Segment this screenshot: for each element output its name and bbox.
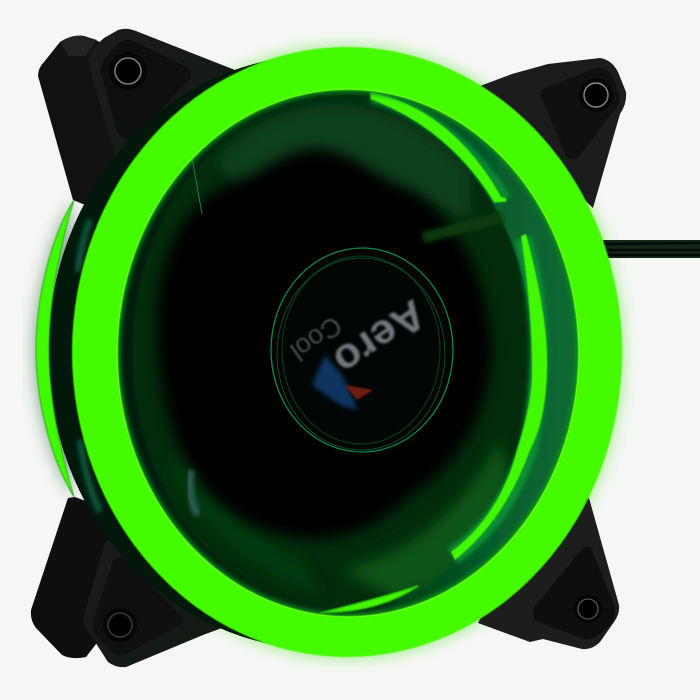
icon: screw hole top left [109,52,147,90]
logo text: Cool: Cool [285,310,348,367]
mounting corner: top left [88,29,240,200]
mounting corner: bottom left rear [31,497,130,658]
lower left shade [174,463,311,588]
outer green glow [34,47,622,657]
fan opening [131,92,578,614]
lower right highlight [340,440,510,600]
inner LED arc: upper [372,94,506,201]
power cable [603,240,700,258]
inner LED arc: right [451,234,547,560]
upper blade highlight [215,105,470,220]
mounting corner: top left rear [38,36,150,215]
hub [271,248,453,452]
icon: screw hole bottom left [103,608,137,642]
logo text: Aero: Aero [325,290,434,385]
dark blade bar [423,217,502,238]
mounting corner: top right [480,58,626,208]
hub logo colours [312,355,358,410]
inner LED arc: lower [320,586,418,613]
front LED ring [72,47,622,657]
fan body behind ring [48,55,592,649]
rear LED crescent [36,200,74,497]
icon: screw hole bottom right [574,595,602,623]
mounting corner: bottom left [84,520,230,667]
black centre [157,150,492,539]
blade reflections [192,158,202,214]
icon: screw hole top right [579,78,613,112]
mounting corner: bottom right [478,498,619,649]
band inside ring [118,90,578,616]
